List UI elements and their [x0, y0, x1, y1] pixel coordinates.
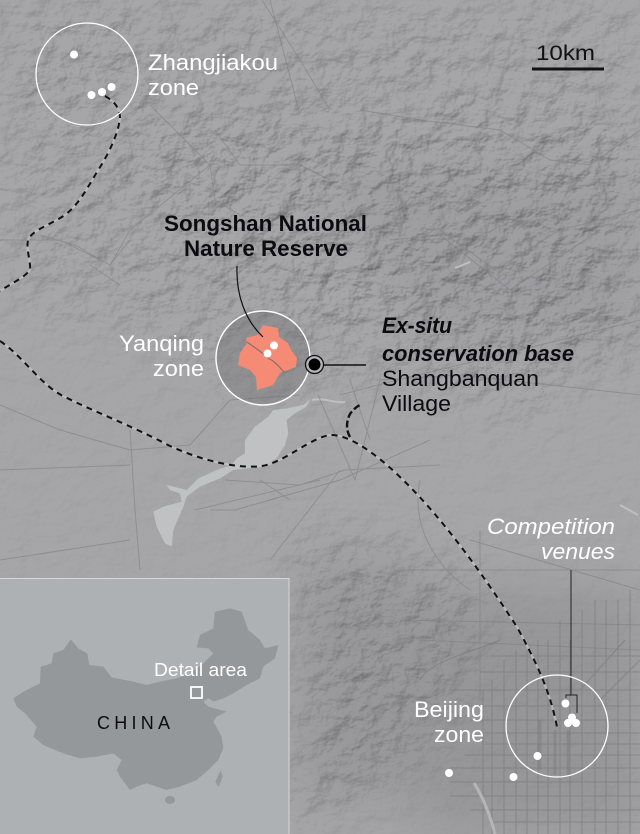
- reserve venues: [264, 342, 278, 358]
- China silhouette: [13, 608, 278, 804]
- Zhangjiakou zone: zone: [148, 75, 199, 100]
- Beijing zone: zone: [434, 722, 484, 747]
- competition venues label: venues: [541, 539, 615, 564]
- competition venues label: Competition: [487, 514, 615, 539]
- reserve internal rivers: [247, 342, 284, 372]
- Songshan reserve label: Songshan National: [164, 211, 367, 236]
- detail area label: Detail area: [154, 660, 248, 680]
- Zhangjiakou zone: [36, 23, 278, 125]
- Songshan reserve area: [238, 325, 297, 390]
- ex-situ base label: conservation base: [382, 341, 574, 366]
- ex-situ base label: Shangbanquan: [382, 366, 539, 391]
- Beijing street grid: [420, 590, 640, 834]
- railway: Yanqing to Beijing: [0, 341, 557, 727]
- detail area marker: [191, 687, 202, 698]
- scale bar: [532, 42, 604, 70]
- ex-situ base label: [382, 313, 574, 416]
- scale bar: 10km: [536, 42, 595, 65]
- ex-situ base label: Village: [382, 391, 451, 416]
- reserve leader line: [237, 266, 263, 337]
- Beijing zone: Beijing: [414, 697, 484, 722]
- competition venues label: [487, 514, 615, 564]
- Zhangjiakou zone: Zhangjiakou: [148, 50, 278, 75]
- inset locator map: [0, 578, 289, 834]
- ex-situ base marker: [306, 356, 366, 374]
- railway: Zhangjiakou branch: [0, 96, 120, 291]
- reservoir and river: [153, 399, 310, 547]
- Yanqing zone: zone: [153, 356, 204, 381]
- Yanqing zone: [119, 311, 310, 405]
- ex-situ base label: Ex-situ: [382, 313, 453, 338]
- Songshan reserve label: Nature Reserve: [184, 236, 348, 261]
- river ribbon and small ponds: [312, 262, 638, 515]
- China label: CHINA: [97, 713, 170, 733]
- Songshan reserve label: [164, 211, 367, 261]
- Beijing zone: [414, 675, 608, 781]
- Yanqing zone: Yanqing: [119, 331, 204, 356]
- venues leader bracket: [566, 570, 577, 713]
